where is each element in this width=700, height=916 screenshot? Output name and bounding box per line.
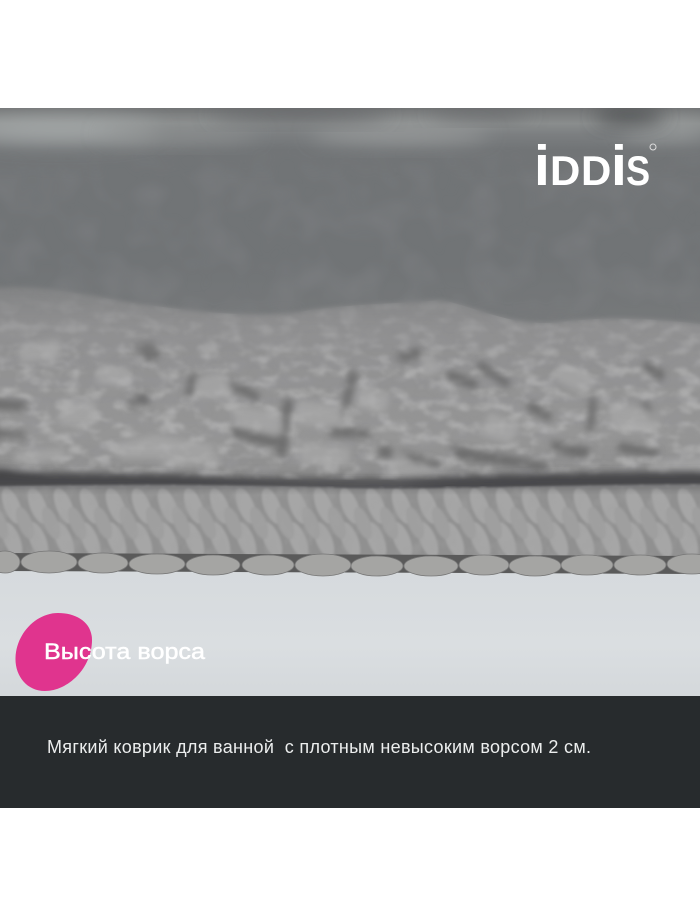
logo: iDDiS: D (581, 147, 611, 194)
logo: iDDiS: S (626, 149, 650, 195)
caption text: Мягкий коврик для ванной с плотным невысоким ворсом 2 см. (47, 737, 591, 757)
pile tufts dark shadows (0, 342, 665, 471)
logo: iDDiS: i (534, 134, 550, 198)
braided base (0, 480, 700, 558)
product photo: bath mat close-up (0, 108, 700, 696)
pink blob accent (15, 613, 92, 691)
floor (0, 570, 700, 696)
dark caption band (0, 696, 700, 808)
logo: iDDiS: i (611, 134, 627, 198)
pile tufts light highlights (15, 339, 700, 479)
logo: iDDiS (534, 134, 656, 198)
stitched scalloped edge (0, 551, 700, 576)
blurred rug background (0, 108, 700, 328)
dark gap between pile and base (0, 468, 700, 494)
logo: iDDiS: D (550, 147, 580, 194)
heading: Высота ворса (44, 639, 206, 664)
plush pile (0, 280, 700, 486)
